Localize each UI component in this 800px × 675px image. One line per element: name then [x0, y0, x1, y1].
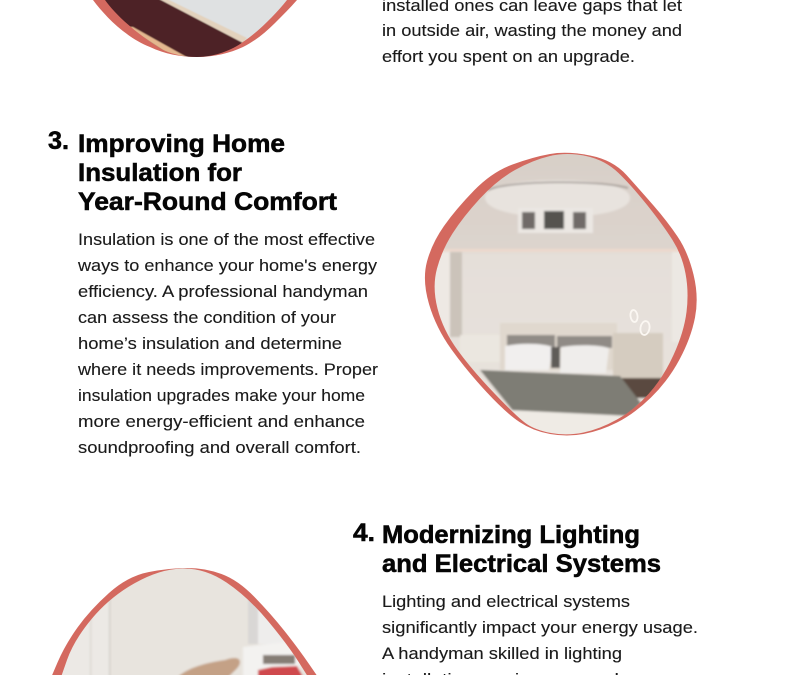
image: window and maroon frame in blob mask	[93, 0, 297, 57]
number: 4: 4.	[353, 519, 375, 547]
number: 3: 3.	[48, 127, 69, 155]
text block: section 3 body: ways to enhance your home's energy	[77, 256, 378, 275]
text block: section 4 body: Lighting and electrical systems	[382, 592, 630, 611]
heading: section 4	[382, 521, 661, 578]
text block: end of section 2	[382, 0, 682, 66]
text block: section 3 body: home’s insulation and determine	[78, 334, 342, 353]
text block: section 3 body: can assess the condition of your	[78, 308, 336, 327]
text block: section 4 body	[382, 592, 698, 675]
heading: section 4: Modernizing Lighting	[382, 521, 640, 549]
text block: end of section 2: in outside air, wasting the money and	[382, 21, 682, 40]
image: hand at electrical panel in blob mask	[50, 560, 320, 675]
heading: section 3: Improving Home	[78, 130, 285, 158]
text block: end of section 2: effort you spent on an upgrade.	[382, 47, 635, 66]
text block: section 4 body: significantly impact your energy usage.	[382, 618, 698, 637]
text block: section 3 body: soundproofing and overall comfort.	[78, 438, 361, 457]
heading: section 3	[78, 130, 338, 216]
text block: section 3 body	[77, 230, 378, 457]
heading: section 3: Year-Round Comfort	[78, 188, 338, 216]
text block: section 3 body: insulation upgrades make your home	[78, 386, 365, 405]
text block: section 4 body: A handyman skilled in lighting	[382, 644, 622, 663]
heading: section 3: Insulation for	[78, 159, 242, 187]
text block: section 3 body: Insulation is one of the most effective	[78, 230, 375, 249]
image: bedroom with ceiling detector in blob mask	[420, 150, 700, 440]
text block: section 3 body: where it needs improvements. Proper	[77, 360, 378, 379]
heading: section 4: and Electrical Systems	[382, 550, 661, 578]
text block: section 3 body: more energy-efficient and enhance	[78, 412, 365, 431]
text block: section 3 body: efficiency. A professional handyman	[78, 282, 368, 301]
